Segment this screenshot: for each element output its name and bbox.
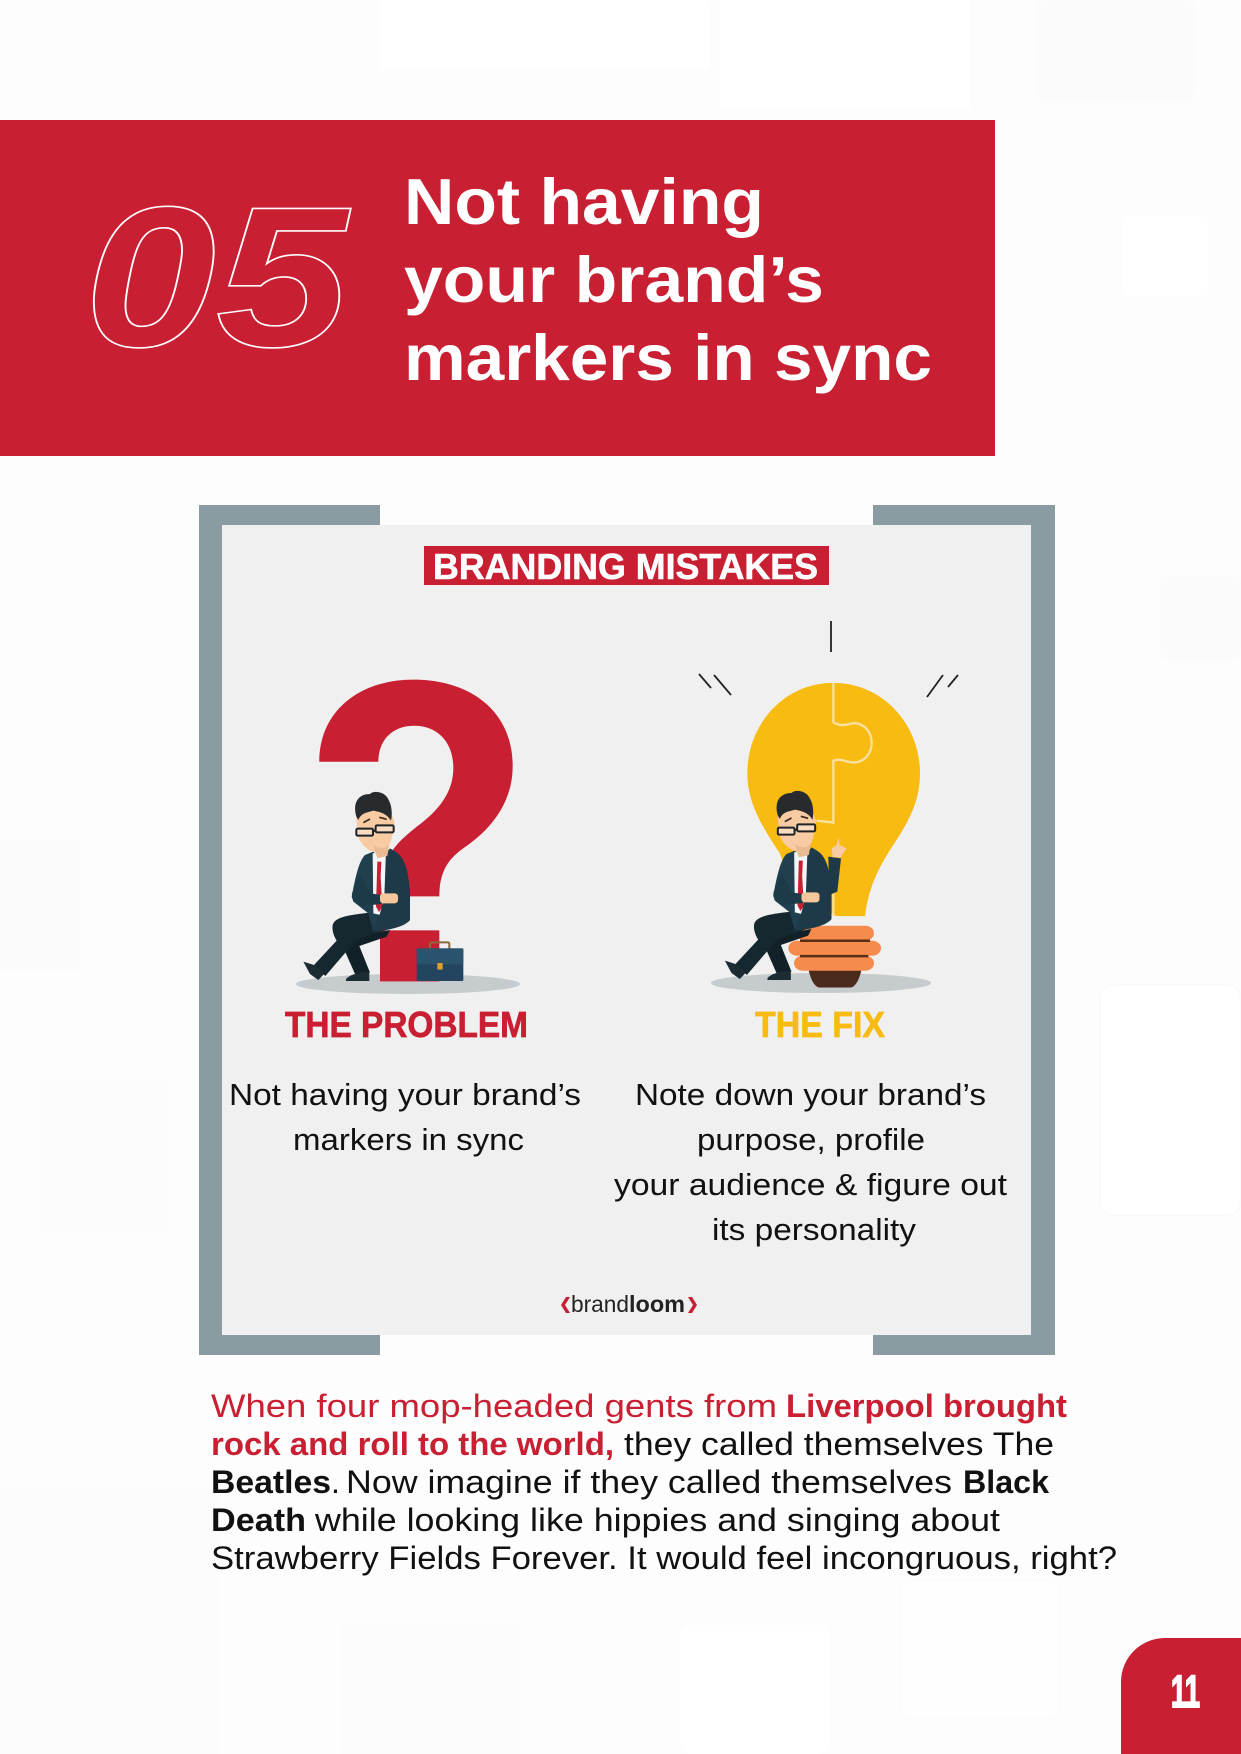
- bulb base: [788, 926, 881, 987]
- body paragraph: [211, 1388, 1117, 1576]
- body paragraph: Beatles: [211, 1464, 331, 1500]
- text: fix description: purpose, profile: [697, 1122, 925, 1157]
- banner heading: your brand’s: [404, 243, 824, 316]
- body paragraph: .: [331, 1464, 340, 1500]
- text: problem description: markers in sync: [293, 1122, 524, 1157]
- framed panel: branding mistakes: [199, 505, 1055, 1355]
- body paragraph: Black: [963, 1464, 1049, 1500]
- icon: briefcase: [417, 942, 463, 981]
- brandloom logo: loom: [629, 1291, 685, 1317]
- text: fix description: your audience & figure out: [614, 1167, 1007, 1202]
- body paragraph: When four mop-headed gents from: [211, 1388, 777, 1424]
- illustration: the problem: [296, 680, 520, 994]
- text: fix description: Note down your brand’s: [635, 1077, 986, 1112]
- text: fix description: its personality: [712, 1212, 917, 1247]
- page number tab: 11: [1171, 1666, 1200, 1717]
- title banner: [0, 120, 995, 456]
- panel tag: BRANDING MISTAKES: BRANDING MISTAKES: [433, 546, 818, 587]
- brandloom logo: [561, 1291, 697, 1317]
- body paragraph: Strawberry Fields Forever. It would feel incongruous, right?: [211, 1540, 1117, 1576]
- banner heading: markers in sync: [404, 321, 932, 394]
- body paragraph: Now imagine if they called themselves: [346, 1464, 952, 1500]
- body paragraph: rock and roll to the world,: [211, 1426, 614, 1462]
- light rays: [699, 621, 958, 697]
- banner heading: Not having: [404, 165, 764, 238]
- text: problem description: Not having your brand’s: [229, 1077, 581, 1112]
- text: fix description: [614, 1077, 1007, 1247]
- figure: seated businessman, thinking: [303, 792, 410, 981]
- page number tab: [1121, 1638, 1241, 1754]
- banner heading: [404, 165, 932, 394]
- icon: question mark: [319, 680, 513, 981]
- figure: seated businessman, hand raised: [725, 791, 847, 980]
- body paragraph: while looking like hippies and singing about: [314, 1502, 1000, 1538]
- text: problem description: [229, 1077, 581, 1157]
- heading: the fix: THE FIX: [755, 1004, 885, 1045]
- ground shadow: [296, 974, 520, 994]
- heading: the problem: THE PROBLEM: [285, 1004, 528, 1045]
- icon: puzzle light bulb: [747, 683, 920, 987]
- body paragraph: Death: [211, 1502, 306, 1538]
- brandloom logo: brand: [571, 1291, 629, 1317]
- illustration: the fix: [699, 621, 958, 993]
- ground shadow: [711, 973, 931, 993]
- body paragraph: they called themselves The: [624, 1426, 1054, 1462]
- body paragraph: Liverpool brought: [786, 1388, 1067, 1424]
- outlined number 05: 05: [84, 166, 351, 389]
